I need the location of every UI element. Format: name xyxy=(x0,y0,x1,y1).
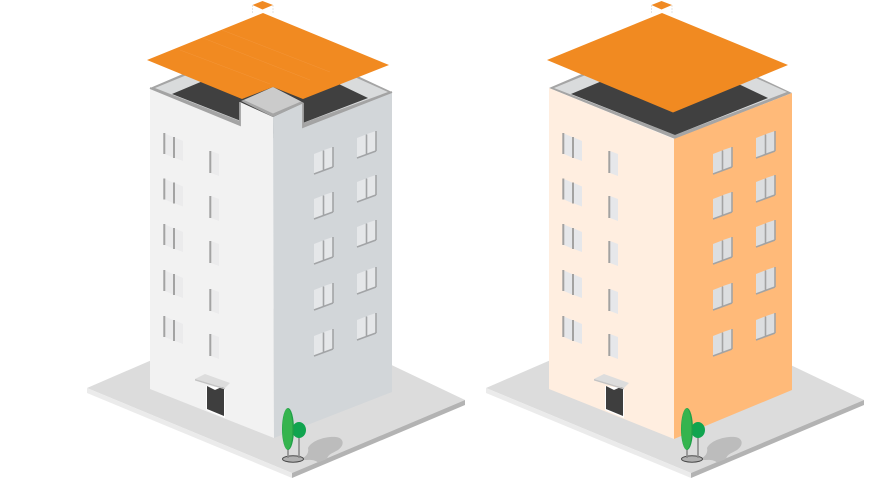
building illustration: white version with cut-away roof xyxy=(87,1,465,478)
ground slab xyxy=(486,308,864,478)
roof parapet xyxy=(549,36,792,139)
right wall windows xyxy=(314,131,376,356)
wall top edge trim xyxy=(150,88,392,127)
tree xyxy=(681,408,742,462)
right wall windows xyxy=(713,131,775,356)
left wall xyxy=(549,88,674,439)
right wall xyxy=(674,93,792,439)
orange roof panel with corner cut xyxy=(147,13,389,99)
orange roof panel xyxy=(547,13,788,112)
building illustration: peach version with complete roof xyxy=(486,1,864,478)
left wall xyxy=(150,88,274,438)
tree xyxy=(282,408,343,462)
roof vent marker xyxy=(652,1,672,14)
ground slab xyxy=(87,308,465,478)
right wall xyxy=(273,92,392,438)
roof vent marker xyxy=(252,1,273,14)
door and canopy xyxy=(594,374,629,418)
exposed corner roof section xyxy=(241,87,304,117)
left wall windows xyxy=(164,133,219,359)
left wall windows xyxy=(563,133,618,359)
door and canopy xyxy=(195,374,230,418)
roof parapet xyxy=(150,36,392,138)
